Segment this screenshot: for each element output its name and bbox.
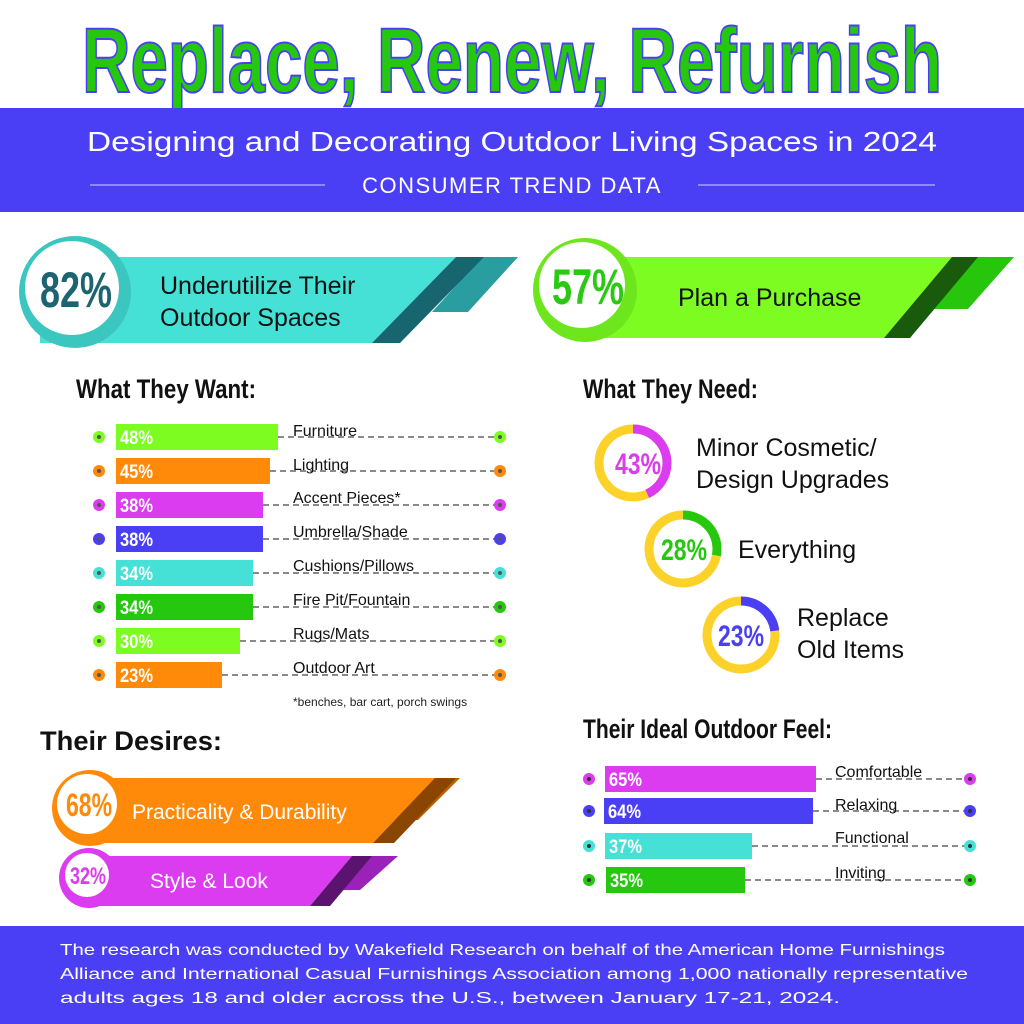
banner: 68% practicality: 68% xyxy=(66,787,112,823)
heading: their desires: Their Desires: xyxy=(40,726,222,756)
footer: Alliance and International Casual Furnishings Association among 1,000 nationally representative xyxy=(60,966,968,983)
footer xyxy=(0,926,1024,1024)
bar chart: ideal outdoor feel: Relaxing xyxy=(835,797,897,814)
donut: 23% replace old items: Old Items xyxy=(797,636,904,664)
bar chart: what they want: Furniture xyxy=(293,423,357,440)
bar chart: ideal outdoor feel: 37% xyxy=(609,837,642,858)
bar chart: ideal outdoor feel: Inviting xyxy=(835,865,886,882)
bar chart: what they want: Cushions/Pillows xyxy=(293,558,414,575)
donut: 43% minor cosmetic: Design Upgrades xyxy=(696,466,889,494)
banner: 82% underutilize: Outdoor Spaces xyxy=(160,304,341,332)
bar chart: what they want: Lighting xyxy=(293,457,349,474)
banner: 82% underutilize: Underutilize Their xyxy=(160,272,355,300)
donut: 23% replace old items: 23% xyxy=(718,620,764,653)
banner: 68% practicality xyxy=(52,770,460,846)
banner: 57% plan a purchase: Plan a Purchase xyxy=(678,284,861,312)
donut: 43% minor cosmetic: 43% xyxy=(615,448,661,481)
donut: 43% minor cosmetic xyxy=(599,429,889,497)
heading: what they need: What They Need: xyxy=(583,374,758,404)
bar chart: ideal outdoor feel: 64% xyxy=(608,802,641,823)
bar chart: ideal outdoor feel: 65% xyxy=(609,770,642,791)
banner: 57% plan a purchase: 57% xyxy=(552,259,624,315)
banner: 32% style: 32% xyxy=(70,863,106,890)
bar chart: what they want: 38% xyxy=(120,496,153,517)
banner: 32% style: Style & Look xyxy=(150,870,268,893)
banner: 82% underutilize: 82% xyxy=(40,262,112,318)
bar chart: what they want: 48% xyxy=(120,428,153,449)
banner: 32% style xyxy=(59,848,398,908)
donut: 28% everything: Everything xyxy=(738,536,856,564)
bar chart: ideal outdoor feel: 35% xyxy=(610,871,643,892)
subheading: CONSUMER TREND DATA xyxy=(362,173,662,198)
bar chart: what they want: 38% xyxy=(120,530,153,551)
donut: 23% replace old items xyxy=(707,601,904,669)
bar chart: what they want: Outdoor Art xyxy=(293,660,375,677)
donut: 28% everything xyxy=(649,515,856,583)
bar chart: ideal outdoor feel: Comfortable xyxy=(835,764,922,781)
footnote: *benches, bar cart, porch swings xyxy=(293,695,467,709)
footer: The research was conducted by Wakefield Research on behalf of the American Home Furnishings xyxy=(60,942,945,959)
bar chart: what they want: 34% xyxy=(120,564,153,585)
donut: 28% everything: 28% xyxy=(661,534,707,567)
heading: ideal outdoor feel: Their Ideal Outdoor Feel: xyxy=(583,714,832,744)
subtitle: Designing and Decorating Outdoor Living Spaces in 2024 xyxy=(87,126,937,157)
bar chart: what they want: Umbrella/Shade xyxy=(293,524,408,541)
heading: what they want: What They Want: xyxy=(76,374,256,404)
bar chart: what they want: Accent Pieces* xyxy=(293,490,401,507)
banner: 68% practicality: Practicality & Durability xyxy=(132,801,347,824)
bar chart: what they want xyxy=(93,423,506,688)
bar chart: ideal outdoor feel xyxy=(583,764,976,893)
bar chart: ideal outdoor feel: Functional xyxy=(835,830,909,847)
banner: 82% underutilize xyxy=(19,236,518,348)
banner: 57% plan a purchase xyxy=(533,238,1014,342)
bar chart: what they want: Rugs/Mats xyxy=(293,626,369,643)
bar chart: what they want: 45% xyxy=(120,462,153,483)
bar chart: what they want: Fire Pit/Fountain xyxy=(293,592,410,609)
donut: 43% minor cosmetic: Minor Cosmetic/ xyxy=(696,434,877,462)
donut: 23% replace old items: Replace xyxy=(797,604,889,632)
bar chart: what they want: 23% xyxy=(120,666,153,687)
bar chart: what they want: 30% xyxy=(120,632,153,653)
header band xyxy=(0,108,1024,212)
bar chart: what they want: 34% xyxy=(120,598,153,619)
footer: adults ages 18 and older across the U.S., between January 17-21, 2024. xyxy=(60,990,840,1007)
